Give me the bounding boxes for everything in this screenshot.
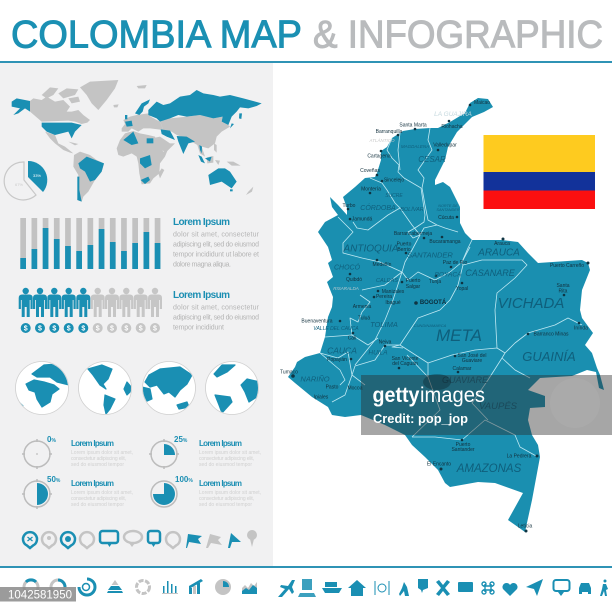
- department labels: CALDAS: [376, 278, 398, 284]
- map: Colombia: BOGOTÁ: [420, 299, 447, 306]
- department labels: ATLÁNTICO: [369, 137, 395, 143]
- text block: bar chart note: adipiscing elit, sed do eiusmod: [173, 242, 259, 248]
- globe: Africa and Europe: [14, 362, 69, 414]
- coin row: $: [38, 326, 42, 332]
- department labels: LA GUAJIRA: [434, 111, 472, 118]
- department labels: SANTANDER: [436, 208, 460, 212]
- department labels: ARAUCA: [477, 248, 520, 258]
- watermark: getty images: [361, 374, 612, 435]
- text block: bar chart note: dolore magna aliqua.: [173, 262, 231, 268]
- city labels: Medellín: [373, 262, 392, 268]
- globe: Atlantic: [206, 362, 260, 414]
- coin row: $: [24, 326, 28, 332]
- panel: left background: [0, 63, 273, 566]
- text block: people note: Lorem Ipsum: [173, 290, 230, 301]
- stat: 50%: Lorem Ipsum: [71, 479, 114, 488]
- city labels: Cartagena: [367, 154, 391, 160]
- city labels: Barranco Minas: [533, 332, 569, 338]
- globe: Asia: [142, 362, 196, 414]
- department labels: TOLIMA: [370, 320, 398, 329]
- icon row: pins and flags: [23, 530, 257, 548]
- text block: people note: [173, 290, 260, 332]
- city labels: Inírida: [574, 326, 588, 332]
- city labels: Montería: [361, 186, 381, 192]
- stat: 100%: 100%: [175, 475, 193, 484]
- city labels: Bucaramanga: [429, 239, 461, 245]
- stat: 100%: sed do eiusmod tempor: [199, 502, 252, 508]
- stat: 0%: Lorem Ipsum: [71, 439, 114, 448]
- stat: 100%: consectetur adipiscing elit,: [199, 496, 254, 502]
- city labels: Turbo: [343, 203, 356, 209]
- people pictogram: [19, 288, 162, 317]
- department labels: GUAINÍA: [522, 349, 576, 364]
- department labels: HUILA: [368, 350, 388, 356]
- city labels: Santander: [451, 447, 475, 453]
- department labels: MAGDALENA: [401, 144, 429, 149]
- title: [11, 14, 603, 56]
- globe: Americas: [78, 362, 133, 414]
- stat: 100%: [151, 475, 261, 508]
- stat: 0%: sed do eiusmod tempor: [71, 462, 124, 468]
- stat: 0%: [22, 435, 133, 469]
- department labels: RISARALDA: [333, 286, 359, 291]
- city dots: [291, 104, 590, 532]
- city labels: Barrancabermeja: [394, 231, 432, 237]
- image id badge: [0, 587, 76, 602]
- department labels: [300, 111, 576, 475]
- city labels: San José del: [458, 353, 486, 359]
- bottom rule: [0, 566, 612, 568]
- city labels: San Vicente: [392, 356, 419, 362]
- department labels: NORTE DE: [438, 204, 458, 208]
- map shape: [288, 98, 604, 532]
- city labels: El Encanto: [427, 462, 451, 468]
- coin row: $: [153, 326, 157, 332]
- city labels: Pasto: [326, 384, 339, 390]
- city labels: [280, 100, 588, 530]
- city labels: Maicao: [474, 100, 490, 106]
- stat: 0%: Lorem ipsum dolor sit amet,: [71, 450, 133, 456]
- department labels: NARIÑO: [300, 374, 330, 384]
- stat: 50%: 50%: [47, 475, 61, 484]
- department labels: CHOCÓ: [334, 262, 361, 272]
- city labels: Guaviare: [462, 358, 482, 364]
- text block: people note: tempor incididunt: [173, 324, 224, 332]
- city labels: Neiva: [379, 340, 392, 346]
- city labels: Mocoa: [347, 386, 363, 392]
- department labels: SANTANDER: [407, 250, 453, 260]
- city labels: Popayán: [327, 357, 347, 363]
- city labels: Barranquilla: [376, 129, 403, 135]
- stat: 0%: 0%: [47, 435, 56, 444]
- pie chart: 33%: [4, 161, 47, 200]
- city labels: Coveñas: [360, 168, 380, 174]
- stat: 50%: consectetur adipiscing elit,: [71, 496, 126, 502]
- stat: 50%: Lorem ipsum dolor sit amet,: [71, 490, 133, 496]
- department labels: CUNDINAMARCA: [414, 323, 447, 328]
- department labels: META: [436, 326, 482, 345]
- city labels: Ibagué: [385, 300, 401, 306]
- department labels: GUAVIARE: [442, 375, 489, 385]
- city labels: Puerto: [456, 442, 471, 448]
- icon row: left chart icons: [24, 579, 257, 595]
- city labels: Puerto: [397, 242, 412, 248]
- city labels: Calamar: [453, 366, 472, 372]
- department labels: AMAZONAS: [456, 463, 522, 475]
- city labels: Santa Marta: [399, 122, 427, 128]
- city labels: Tuluá: [358, 316, 370, 322]
- city labels: Santa: [556, 283, 570, 289]
- city labels: Paz de Rio: [443, 260, 467, 266]
- city labels: Salgar: [406, 284, 421, 290]
- bar chart: [20, 218, 160, 269]
- city labels: Cali: [348, 336, 356, 342]
- coin row: $: [110, 326, 114, 332]
- department labels: VAUPÉS: [479, 401, 518, 412]
- title: COLOMBIA MAP: [11, 14, 302, 56]
- coin row: [21, 323, 160, 333]
- stat: 25%: Lorem Ipsum: [199, 439, 242, 448]
- stat: 25%: [149, 435, 261, 469]
- stat: 100%: Lorem ipsum dolor sit amet,: [199, 490, 261, 496]
- pie chart: 33%: 33%: [33, 173, 41, 178]
- city labels: Sincelejo: [384, 178, 404, 184]
- department labels: CÓRDOBA: [360, 203, 396, 212]
- city labels: Buenaventura: [301, 318, 333, 324]
- city labels: Puerto Carreño: [550, 263, 584, 269]
- stat: 0%: consectetur adipiscing elit,: [71, 456, 126, 462]
- city labels: Yopal: [456, 286, 468, 292]
- city labels: Ipiales: [314, 394, 329, 400]
- department labels: VALLE DEL CAUCA: [313, 326, 359, 332]
- department labels: BOLÍVAR: [400, 206, 424, 213]
- title: & INFOGRAPHIC: [313, 14, 603, 56]
- city labels: La Pedrera: [507, 454, 532, 460]
- text block: bar chart note: tempor incididunt ut labore et: [173, 252, 259, 258]
- icon row: right travel icons: [278, 579, 608, 597]
- city labels: Manizales: [382, 289, 405, 295]
- stat: 50%: sed do eiusmod tempor: [71, 502, 124, 508]
- text block: bar chart note: [173, 217, 260, 268]
- stat: 100%: Lorem Ipsum: [199, 479, 242, 488]
- flag: Colombia: [484, 135, 595, 209]
- city labels: Armenia: [353, 304, 372, 310]
- city labels: Quibdó: [346, 277, 362, 283]
- image id badge: 1042581950: [8, 590, 72, 602]
- watermark: getty images: images: [420, 383, 485, 407]
- stat: 50%: [22, 475, 133, 509]
- city labels: Tunja: [429, 279, 441, 285]
- city labels: Rita: [559, 288, 568, 294]
- coin row: $: [67, 326, 71, 332]
- watermark: getty images: getty: [372, 383, 420, 407]
- world map: [12, 80, 262, 202]
- city labels: Tumaco: [280, 370, 298, 376]
- city labels: Arauca: [494, 241, 510, 247]
- coin row: $: [52, 326, 56, 332]
- stat: 25%: consectetur adipiscing elit,: [199, 456, 254, 462]
- coin row: $: [96, 326, 100, 332]
- city labels: Pereira: [376, 294, 392, 300]
- stat: 25%: Lorem ipsum dolor sit amet,: [199, 450, 261, 456]
- department labels: VICHADA: [498, 295, 564, 312]
- map: Colombia: [280, 98, 604, 532]
- city labels: Leticia: [518, 524, 532, 530]
- text block: people note: dolor sit amet, consectetur: [173, 304, 260, 312]
- stat: 25%: 25%: [174, 435, 188, 444]
- department labels: CESAR: [418, 155, 446, 164]
- city labels: del Caguán: [392, 361, 418, 367]
- text block: people note: adipiscing elit, sed do eiusmod: [173, 314, 259, 322]
- stat: 25%: sed do eiusmod tempor: [199, 462, 252, 468]
- department labels: CASANARE: [465, 268, 516, 278]
- city labels: Cúcuta: [438, 215, 454, 221]
- city labels: Valledupar: [433, 142, 457, 148]
- department borders: [320, 128, 582, 457]
- department labels: SUCRE: [385, 193, 403, 199]
- coin row: $: [81, 326, 85, 332]
- city labels: Riohacha: [441, 124, 463, 130]
- city labels: Berrio: [397, 247, 411, 253]
- top rule: [0, 61, 612, 63]
- pie chart: 33%: 67%: [15, 182, 23, 187]
- city labels: Jamundá: [352, 216, 372, 222]
- coin row: $: [124, 326, 128, 332]
- watermark: getty images: Credit: pop_jop: [373, 412, 468, 426]
- department labels: CAUCA: [327, 346, 357, 356]
- coin row: $: [139, 326, 143, 332]
- city labels: Puerto: [406, 278, 421, 284]
- text block: bar chart note: Lorem Ipsum: [173, 217, 230, 228]
- department labels: ANTIOQUIA: [342, 244, 399, 254]
- department labels: BOYACÁ: [435, 270, 462, 278]
- text block: bar chart note: dolor sit amet, consectetur: [173, 232, 260, 238]
